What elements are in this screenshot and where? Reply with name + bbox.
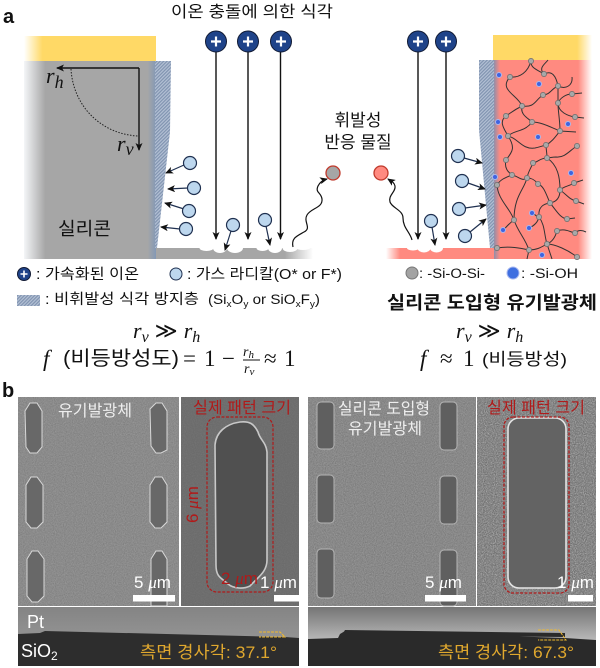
equation left: h: [192, 329, 200, 346]
etched pads: [25, 403, 167, 606]
equation right: v: [465, 329, 473, 346]
equation right: [420, 318, 567, 371]
label: sidewall angle: 측면 경사각: 37.1°: [140, 643, 277, 662]
label: sidewall angle: 측면 경사각: 67.3°: [438, 643, 574, 662]
equation right: r: [507, 318, 516, 343]
scale bar 5 um: 5 μm: [425, 573, 462, 592]
legend: passivation layer: y: [310, 299, 316, 309]
polymer network: [497, 60, 586, 259]
equation left: [43, 318, 296, 378]
scale bar 5 um: 5 μm: [134, 573, 171, 592]
etched pad detail: [508, 418, 566, 588]
legend: Si-O-Si: : -Si-O-Si-: [419, 266, 485, 281]
passivation layer: [155, 61, 171, 248]
equation left: r: [133, 318, 142, 343]
gas radicals left: [161, 156, 272, 250]
etched pads: [317, 402, 457, 606]
rate vectors r_h and r_v: v: [126, 139, 134, 159]
legend: passivation layer: : 비휘발성 식각 방지층: [45, 291, 199, 308]
label: actual pattern size: 실제 패턴 크기: [487, 399, 585, 417]
label: actual pattern size: 실제 패턴 크기: [193, 399, 291, 417]
yellow mask: [24, 36, 156, 61]
legend: passivation layer: F: [301, 292, 310, 307]
legend: gas radical: : 가스 라디칼(O* or F*): [187, 266, 342, 283]
equation left: 1: [204, 346, 216, 371]
panel label b: b: [2, 380, 14, 402]
equation left: h: [248, 349, 254, 361]
equation left: r: [184, 318, 193, 343]
legend: passivation layer: [17, 291, 320, 309]
etched pad detail: [215, 422, 267, 588]
label: SiO2: SiO: [21, 641, 51, 661]
label: SiO2: 2: [51, 649, 58, 663]
equation right: (비등방성): [482, 350, 567, 369]
equation left: =: [183, 346, 196, 371]
panel: SEM silicon-doped overview: [308, 397, 476, 606]
silanol nodes: [492, 72, 574, 258]
equation right: r: [456, 318, 465, 343]
equation left: ≫: [155, 318, 178, 343]
heading: silicon-doped photoresist: 실리콘 도입형 유기발광체: [387, 293, 597, 313]
yellow angle marker: [538, 630, 566, 640]
equation left: (비등방성도): [63, 347, 179, 370]
legend: Si-OH: : -Si-OH: [521, 266, 578, 281]
panel: SEM cross section right: [308, 607, 596, 666]
panel: SEM silicon-doped detail: [477, 397, 596, 606]
yellow angle marker: [259, 632, 285, 637]
legend: Si-OH: [507, 266, 578, 281]
network nodes: [494, 58, 580, 260]
label: volatile reaction products line 2: 반응 물질: [324, 133, 392, 152]
rate vectors r_h and r_v: [46, 63, 139, 159]
legend: passivation layer: or SiO: [248, 292, 296, 307]
label: Pt: Pt: [27, 612, 44, 632]
legend: passivation layer: ): [315, 292, 320, 307]
heading: ion collision etching: 이온 충돌에 의한 식각: [171, 3, 333, 21]
scale bar 1 um: 1 μm: [260, 573, 297, 592]
silicon block: [24, 61, 157, 259]
panel: silicon-doped photoresist etching diagram: [374, 31, 592, 260]
rate vectors r_h and r_v: h: [55, 72, 64, 92]
equation left: −: [222, 346, 235, 371]
equation left: f: [43, 346, 53, 371]
rate vectors r_h and r_v: r: [46, 63, 55, 88]
equation right: 1: [463, 346, 474, 371]
equation right: h: [515, 329, 523, 346]
scale bar 5 um: [425, 573, 466, 602]
panel: SEM photoresist overview: [18, 397, 179, 606]
panel label a: a: [3, 6, 15, 28]
equation left: v: [142, 329, 150, 346]
equation right: f: [420, 346, 430, 371]
legend: passivation layer: O: [232, 292, 243, 307]
yellow mask right: [493, 35, 592, 60]
panel: SEM cross section left: [18, 607, 299, 666]
gas radicals right: [424, 150, 486, 245]
scale bar 5 um: [133, 573, 175, 602]
legend: passivation layer: x: [227, 299, 232, 309]
pink floor: [386, 248, 494, 259]
scale bar 1 um: [557, 573, 594, 602]
scallops: [200, 243, 310, 253]
panel: SEM photoresist detail: [181, 397, 299, 606]
scale bar 1 um: 1 μm: [557, 573, 594, 592]
equation right: ≫: [478, 318, 501, 343]
pink photoresist block: [493, 60, 592, 259]
dashed true pattern size: [504, 417, 569, 593]
scale bar 1 um: [260, 573, 299, 602]
rate vectors r_h and r_v: r: [117, 131, 126, 156]
label: 2 um: 2 μm: [221, 569, 258, 588]
equation left: ≈: [264, 346, 277, 371]
wavy path and volatile product: [293, 166, 340, 247]
label: 6 um: 6 μm: [183, 486, 202, 523]
dark etched band: [342, 630, 565, 637]
passivation layer right: [479, 60, 494, 248]
wavy path and volatile product right: [374, 166, 412, 240]
panel: silicon etching diagram: [24, 31, 340, 259]
scallops right: [407, 244, 443, 252]
accelerated ions right: [408, 31, 456, 239]
accelerated ions left: [206, 31, 292, 239]
dashed true pattern size: [207, 417, 273, 592]
equation left: 1: [284, 346, 296, 371]
legend: passivation layer: (Si: [208, 292, 224, 307]
label: photoresist line 2: 유기발광체: [348, 420, 422, 438]
equation left: r: [244, 362, 249, 377]
equation right: ≈: [440, 346, 453, 371]
silicon label: 실리콘: [58, 219, 111, 239]
label: silicon-doped photoresist: 실리콘 도입형: [338, 400, 430, 418]
label: photoresist: 유기발광체: [58, 402, 132, 420]
legend: passivation layer: x: [296, 299, 301, 309]
label: volatile reaction products: 휘발성: [335, 111, 381, 130]
equation left: v: [249, 366, 254, 378]
legend: passivation layer: y: [243, 299, 249, 309]
equation left: r: [243, 345, 248, 360]
legend: [17, 266, 578, 309]
silicon floor: [156, 248, 313, 259]
legend: accelerated ion: : 가속화된 이온: [36, 266, 139, 283]
